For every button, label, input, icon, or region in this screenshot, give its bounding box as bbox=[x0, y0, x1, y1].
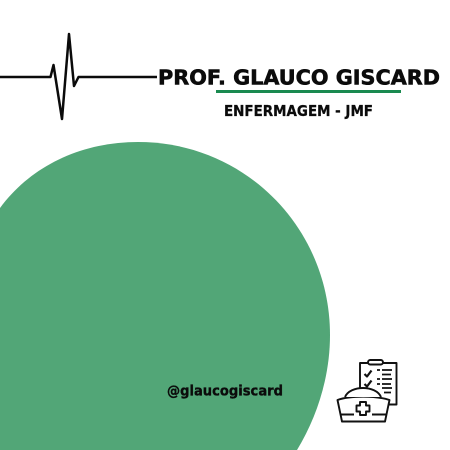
title underline bbox=[216, 90, 401, 93]
clipboard bbox=[360, 360, 396, 404]
icon: nurse cap and clipboard bbox=[338, 360, 396, 422]
title: PROF. GLAUCO GISCARD bbox=[158, 66, 440, 90]
subtitle: ENFERMAGEM - JMF bbox=[224, 102, 373, 120]
green circle bbox=[0, 142, 330, 450]
heartbeat line bbox=[0, 34, 157, 119]
nurse cap bbox=[338, 388, 390, 422]
instagram handle: @glaucogiscard bbox=[167, 384, 283, 400]
